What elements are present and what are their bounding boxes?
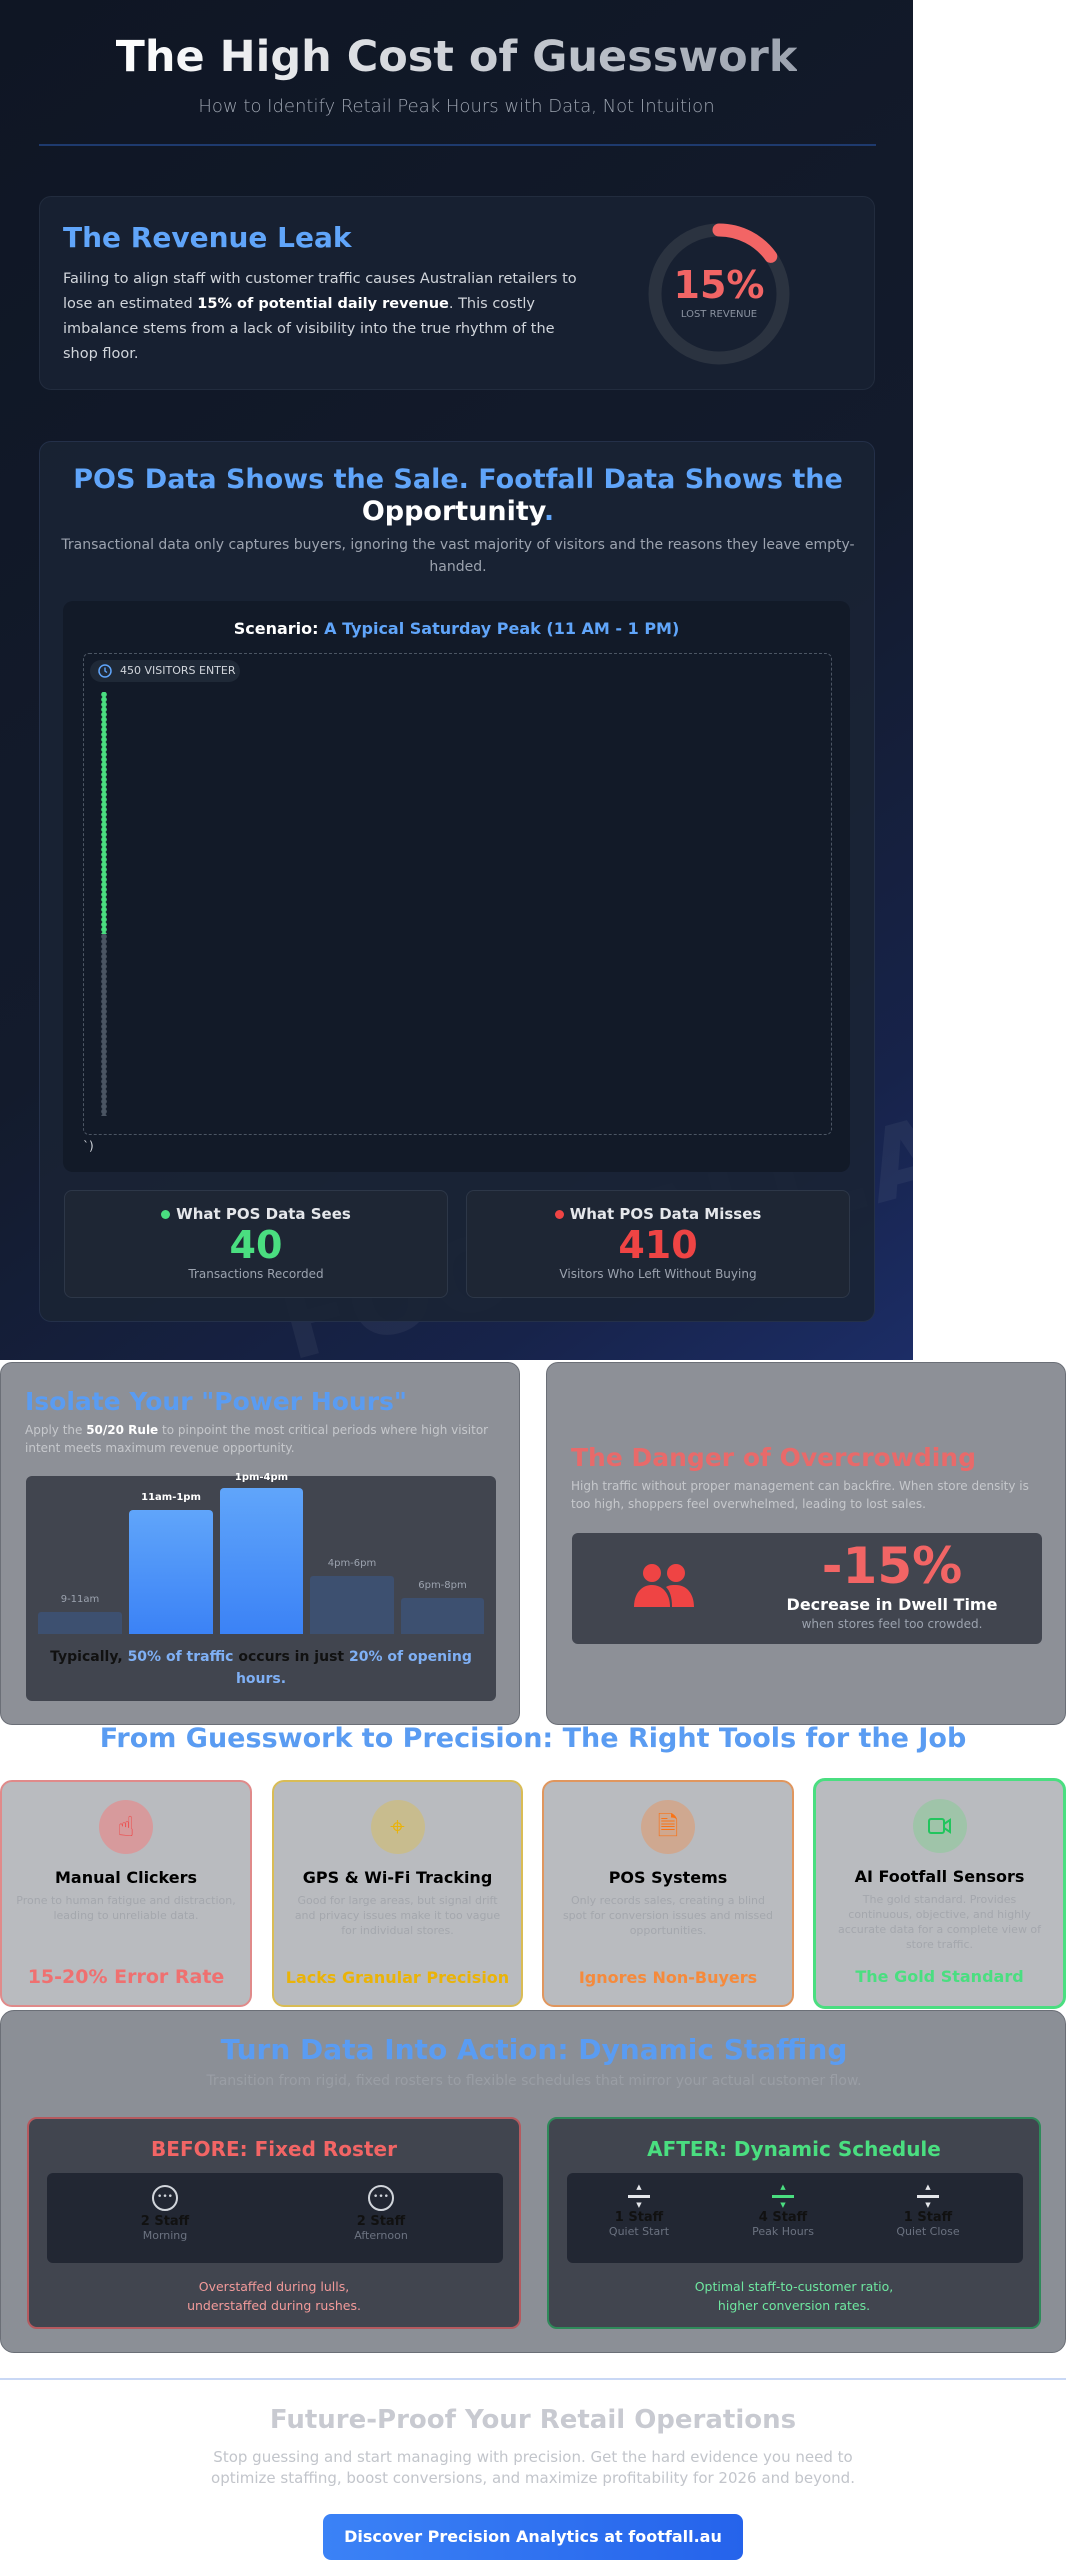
heading: tools: From Guesswork to Precision: The Right Tools for the Job — [100, 1723, 966, 1754]
after schedule: ▲ — [780, 2183, 786, 2191]
after schedule: Peak Hours — [752, 2225, 814, 2238]
after schedule: Quiet Start — [609, 2225, 669, 2238]
card: manual clickers: Manual Clickers — [55, 1868, 197, 1887]
card: AI sensors: AI Footfall Sensors — [855, 1867, 1024, 1886]
after schedule: 1 Staff — [904, 2210, 952, 2225]
heading: POS data: POS Data Shows the Sale. Footfall Data Shows the Opportunity. — [73, 464, 843, 527]
box: after: Optimal staff-to-customer ratio, — [695, 2279, 893, 2294]
donut chart: 15%: LOST REVENUE — [681, 309, 757, 320]
card: manual clickers — [0, 1780, 252, 2007]
card: AI sensors: The gold standard. Provides continuous, objective, and highly accurate data for a complete view of store traffic. — [838, 1893, 1041, 1951]
card: AI sensors — [813, 1778, 1066, 2009]
stat box: dwell time: Decrease in Dwell Time — [787, 1595, 997, 1614]
panel: power hours — [0, 1362, 520, 1725]
after schedule: ▲ — [925, 2183, 931, 2191]
panel: dynamic staffing — [0, 2010, 1066, 2353]
chart caption: Typically, 50% of traffic occurs in just 20% of opening hours. — [50, 1649, 472, 1687]
after schedule: 4 Staff — [759, 2210, 807, 2225]
box: before — [27, 2117, 521, 2329]
CTA button: Discover Precision Analytics at footfall.au — [344, 2527, 722, 2546]
stat: POS sees: Transactions Recorded — [188, 1267, 324, 1281]
visitor dot area — [83, 653, 832, 1135]
panel: POS vs footfall — [39, 441, 875, 1322]
stat: POS misses: What POS Data Misses — [570, 1205, 761, 1223]
scenario heading: Scenario: A Typical Saturday Peak (11 AM - 1 PM) — [234, 619, 679, 638]
heading: power hours: Isolate Your "Power Hours" — [25, 1387, 407, 1416]
scenario box — [63, 601, 850, 1172]
stat box: dwell time — [572, 1533, 1042, 1644]
card: GPS wifi: GPS & Wi-Fi Tracking — [303, 1868, 492, 1887]
icon: receipt — [641, 1800, 695, 1854]
stat: POS sees — [64, 1190, 448, 1298]
box: after: AFTER: Dynamic Schedule — [647, 2137, 941, 2161]
card: POS systems: Ignores Non-Buyers — [579, 1968, 757, 1987]
subtitle: How to Identify Retail Peak Hours with Data, Not Intuition — [198, 96, 715, 117]
heading: overcrowding: The Danger of Overcrowding — [571, 1443, 976, 1472]
CTA button — [323, 2514, 743, 2560]
dots: gray non-buyers — [101, 934, 107, 1116]
card: manual clickers: 15-20% Error Rate — [28, 1966, 224, 1988]
bar chart: 4pm-6pm — [328, 1558, 376, 1569]
stat: POS misses — [466, 1190, 850, 1298]
after schedule: 1 Staff — [615, 2210, 663, 2225]
text: 50/20 rule: Apply the 50/20 Rule to pinpoint the most critical periods where high visitor intent meets maximum revenue opportunity. — [25, 1423, 488, 1455]
box: after — [547, 2117, 1041, 2329]
dark hero section — [0, 0, 913, 1360]
dots: green buyers — [101, 692, 107, 934]
heading: dynamic staffing: Turn Data Into Action: Dynamic Staffing — [221, 2033, 847, 2066]
panel: revenue leak — [39, 196, 875, 390]
subtitle: staffing: Transition from rigid, fixed rosters to flexible schedules that mirror your actual customer flow. — [206, 2073, 862, 2089]
box: before: BEFORE: Fixed Roster — [151, 2137, 397, 2161]
text: revenue leak: Failing to align staff with customer traffic causes Australian retailers to lose an estimated 15% of potential daily revenue. This costly imbalance stems from a lack of visibility into the true rhythm of the shop floor. — [63, 271, 577, 362]
card: GPS wifi: Good for large areas, but signal drift and privacy issues make it too vague for individual stores. — [295, 1894, 500, 1937]
footer heading: Future-Proof Your Retail Operations — [270, 2405, 796, 2435]
icon: signal — [370, 1800, 424, 1854]
before schedule: Morning — [143, 2229, 187, 2242]
stat: POS sees: 40 — [230, 1223, 282, 1267]
badge: 450 visitors: 450 VISITORS ENTER — [120, 664, 235, 677]
bar chart: 11am-1pm — [141, 1492, 201, 1503]
before schedule: 2 Staff — [357, 2214, 405, 2229]
card: manual clickers: Prone to human fatigue and distraction, leading to unreliable data. — [16, 1894, 236, 1922]
subtitle: POS: Transactional data only captures buyers, ignoring the vast majority of visitors and the reasons they leave empty-handed. — [61, 537, 855, 575]
card: GPS wifi — [272, 1780, 523, 2007]
before schedule: ••• — [157, 2192, 173, 2202]
card: POS systems: POS Systems — [609, 1868, 727, 1887]
after schedule: Quiet Close — [896, 2225, 960, 2238]
box: after: higher conversion rates. — [718, 2298, 870, 2313]
panel: overcrowding — [546, 1362, 1066, 1725]
heading: revenue leak: The Revenue Leak — [63, 221, 352, 254]
scenario box: `) — [83, 1139, 94, 1153]
card: POS systems — [542, 1780, 794, 2007]
icon: clock — [98, 664, 112, 678]
bar chart: 9-11am — [61, 1594, 99, 1605]
stat box: dwell time: when stores feel too crowded. — [802, 1617, 982, 1631]
card: AI sensors: The Gold Standard — [855, 1967, 1024, 1986]
bar chart — [26, 1476, 496, 1701]
title: The High Cost of Guesswork — [116, 32, 797, 82]
stat: POS misses: Visitors Who Left Without Buying — [559, 1267, 757, 1281]
text: overcrowding: High traffic without proper management can backfire. When store density is too high, shoppers feel overwhelmed, leading to lost sales. — [571, 1479, 1029, 1511]
bar chart: 1pm-4pm — [235, 1472, 288, 1483]
icon: signal: ⌖ — [390, 1812, 405, 1842]
card: GPS wifi: Lacks Granular Precision — [286, 1968, 509, 1987]
icon: receipt: 🗎 — [658, 1812, 678, 1842]
after schedule: ▼ — [636, 2201, 642, 2209]
donut chart: 15%: 15% — [674, 263, 764, 307]
stat: POS sees: What POS Data Sees — [176, 1205, 351, 1223]
badge: 450 visitors — [90, 660, 240, 682]
before schedule: 2 Staff — [141, 2214, 189, 2229]
box: before: understaffed during rushes. — [187, 2298, 361, 2313]
after schedule — [567, 2173, 1023, 2263]
icon: clicker — [99, 1800, 153, 1854]
after schedule: ▼ — [780, 2201, 786, 2209]
-15% stat: -15% — [822, 1537, 962, 1595]
donut chart: 15% — [648, 224, 790, 364]
card: POS systems: Only records sales, creating a blind spot for conversion issues and missed opportunities. — [563, 1894, 773, 1937]
icon: clicker: ☝ — [117, 1810, 135, 1843]
icon: camera — [912, 1799, 966, 1853]
footer text: Stop guessing and start managing with precision. Get the hard evidence you need to optimize staffing, boost conversions, and maximize profitability for 2026 and beyond. — [211, 2448, 855, 2487]
stat: POS misses: 410 — [618, 1223, 698, 1267]
box: before: Overstaffed during lulls, — [199, 2279, 349, 2294]
after schedule: ▲ — [636, 2183, 642, 2191]
icon: people — [634, 1564, 694, 1607]
before schedule — [47, 2173, 503, 2263]
before schedule: ••• — [373, 2192, 389, 2202]
before schedule: Afternoon — [354, 2229, 408, 2242]
bar chart: 6pm-8pm — [418, 1580, 467, 1591]
after schedule: ▼ — [925, 2201, 931, 2209]
